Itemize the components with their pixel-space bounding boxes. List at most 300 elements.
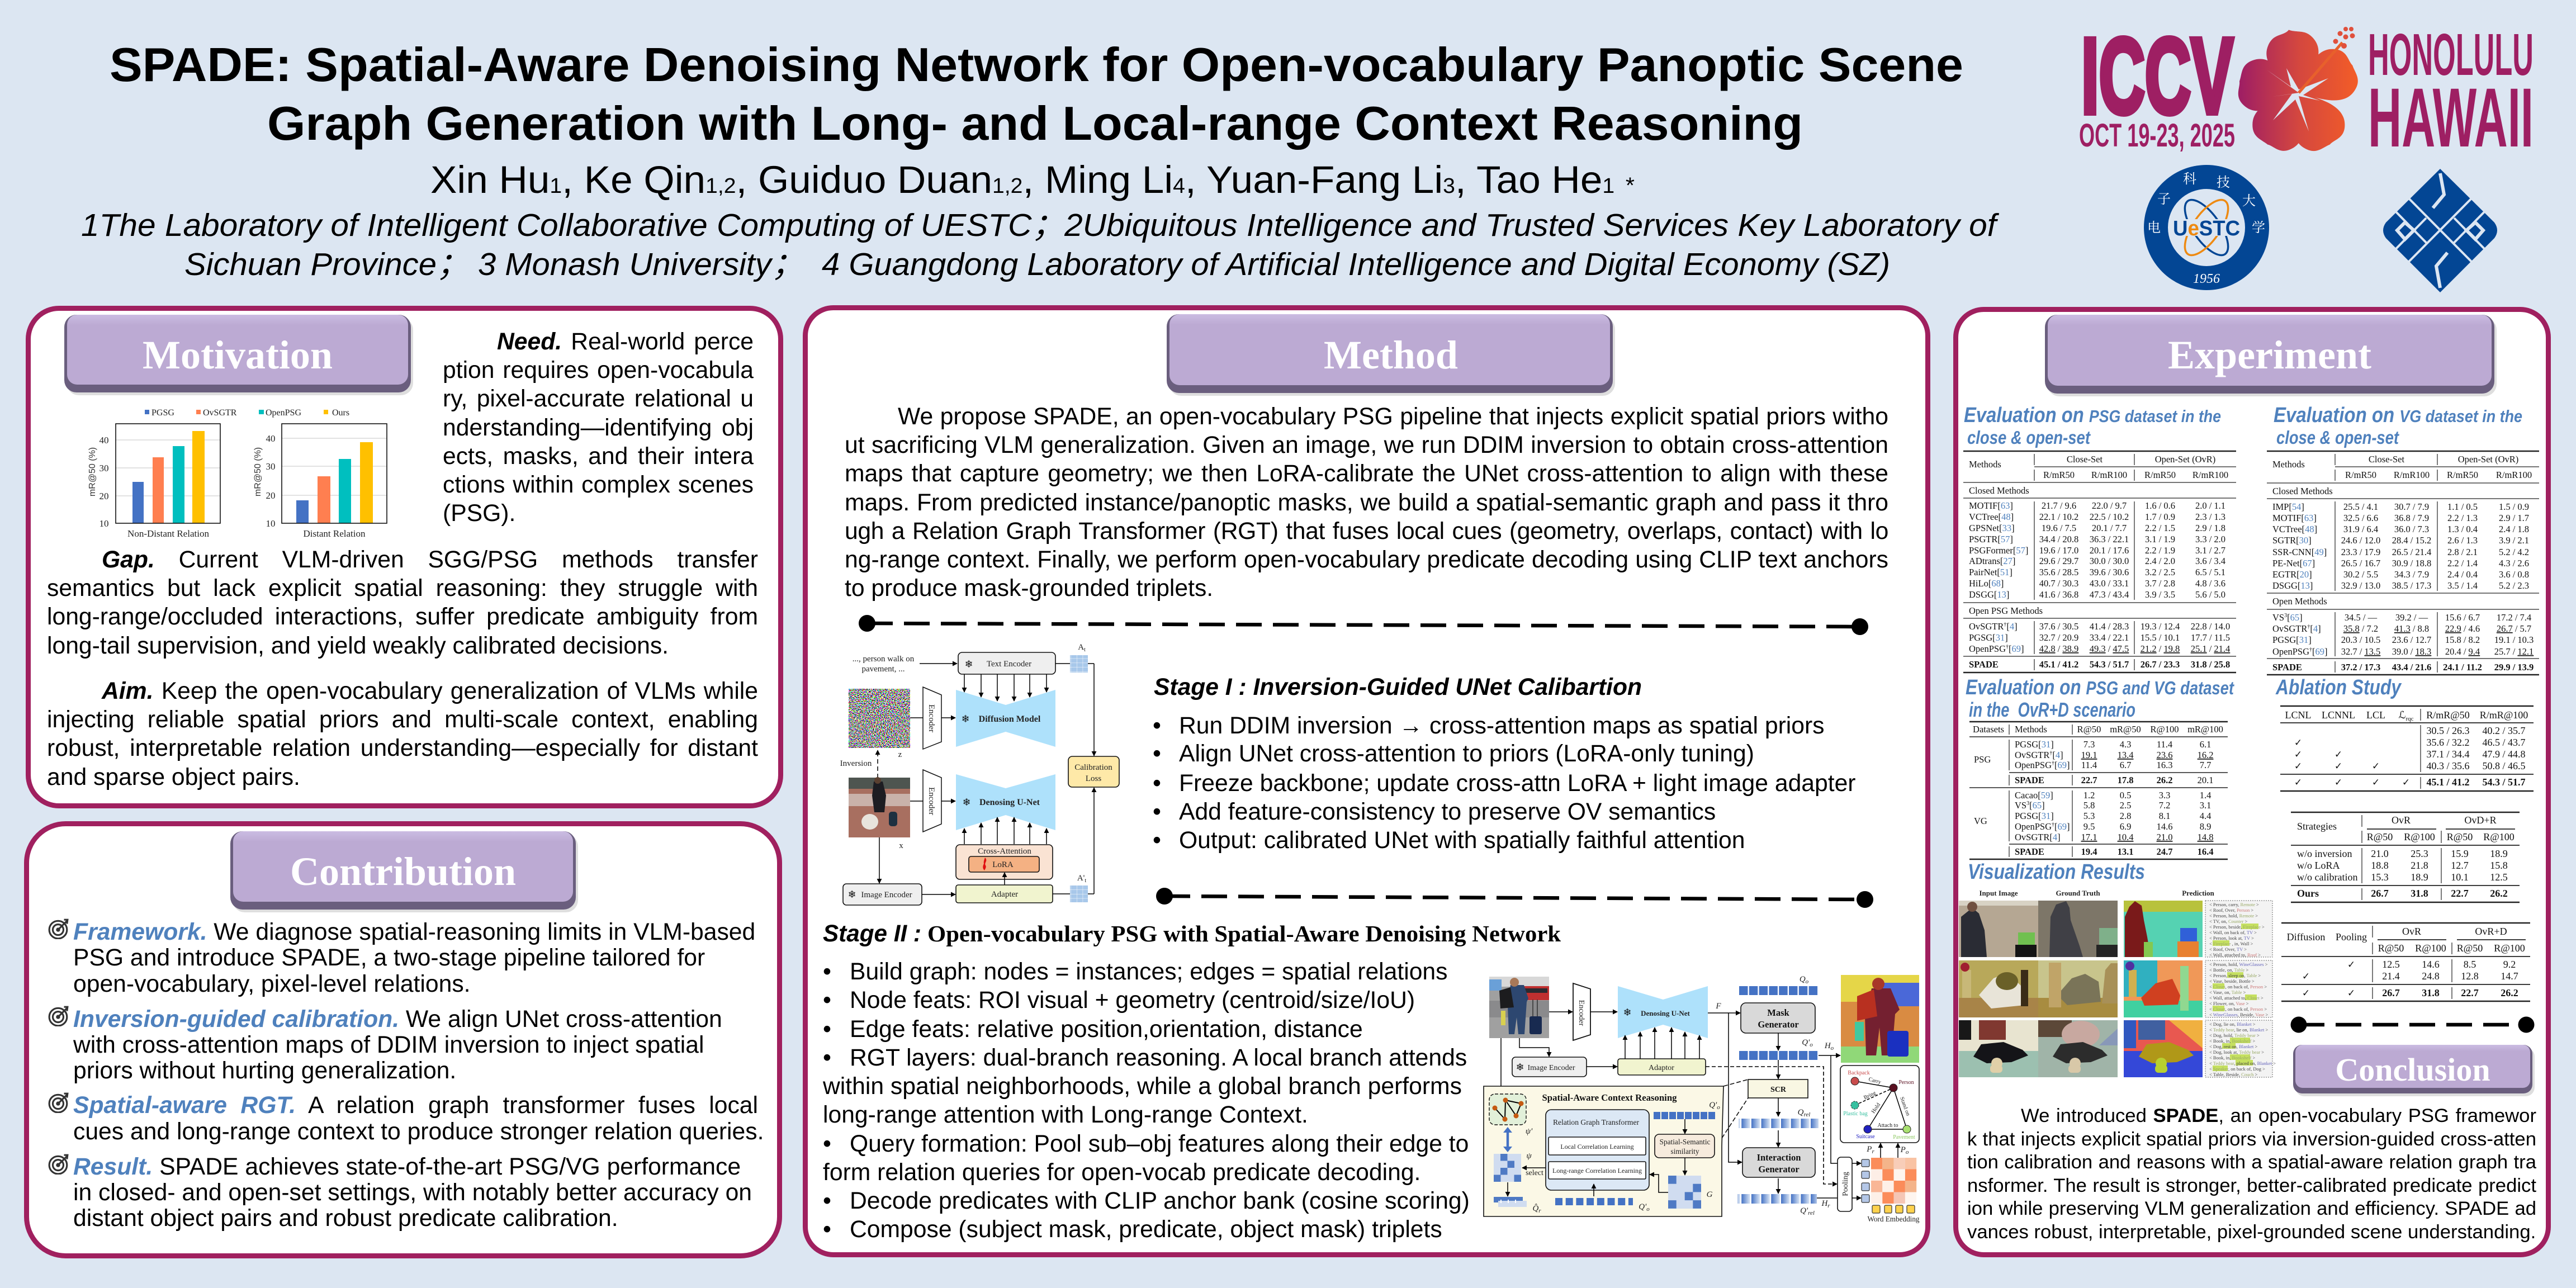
table: VG evaluation: 3.6 / 0.8 [2499, 569, 2529, 580]
adapter [956, 885, 1053, 903]
table: VG evaluation: R/mR100 [2394, 470, 2430, 480]
table: ablation strategies: Ours [2297, 888, 2319, 899]
stage I bullets: Run DDIM inversion → cross-attention maps as spatial priors [1179, 712, 1825, 739]
prediction text panel 2: < WineGlasses, Beside, Vase > [2209, 1012, 2268, 1017]
table: diffusion and pooling: 24.8 [2422, 970, 2440, 982]
heading: PSG evaluation [1964, 404, 2221, 448]
heading: motivation [64, 315, 413, 395]
table: ablation strategies: 31.8 [2411, 888, 2428, 899]
text: need: ects, masks, and their intera [443, 443, 754, 470]
stage II bullets: • [823, 987, 831, 1014]
text: gap [47, 546, 758, 663]
stage II bullets: • [823, 1130, 831, 1157]
table: PSG evaluation: Methods [1969, 459, 2001, 470]
affiliations: Sichuan Province； 3 Monash University； 4 Guangdong Laboratory of Artificial Intelligence and Digital Economy (SZ) [184, 247, 1890, 282]
table: ablation strategies: R@100 [2404, 831, 2435, 842]
table: PSG evaluation: 36.3 / 22.1 [2090, 534, 2129, 544]
text: need: ry, pixel-accurate relational u [443, 385, 754, 412]
prediction text panel 3: < Dog, look at, Teddy bear > [2209, 1049, 2264, 1055]
table: PSG evaluation: 49.3 / 47.5 [2090, 643, 2129, 654]
table: ablation components: ✓ [2402, 777, 2410, 788]
prediction text panel 3: < Teddy bear, placed on, Blanket > [2209, 1060, 2276, 1066]
bar chart: distant relation: 10 [266, 518, 275, 529]
heading: visualization results: Visualization Results [1968, 860, 2145, 884]
bar chart: distant relation [253, 424, 387, 539]
table: VG evaluation: 1.3 / 0.4 [2447, 524, 2478, 534]
text: method overview: maps. From predicted instance/panoptic masks, we build a spatial-semantic graph and pass it thro [845, 489, 1888, 516]
table: OvR+D evaluation: 16.4 [2198, 846, 2213, 857]
text: method overview: ng-range context. Finally, we perform open-vocabulary predicate decoding using CLIP text anchors [845, 546, 1888, 573]
table: VG evaluation: 32.7 / 13.5 [2341, 646, 2380, 657]
heading: VG evaluation: close & open-set [2276, 427, 2400, 448]
table: OvR+D evaluation: 20.1 [2198, 775, 2213, 785]
text: gap: Gap. Current VLM-driven SGG/PSG methods transfer [102, 546, 758, 573]
table: ablation strategies: 22.7 [2451, 888, 2469, 899]
heading: ablation study: Ablation Study [2275, 676, 2402, 699]
table: diffusion and pooling: ✓ [2302, 988, 2310, 999]
text: conclusion: vances robust, interpretable, pixel-grounded scene understanding. [1967, 1221, 2536, 1243]
table: VG evaluation: 30.2 / 5.5 [2343, 569, 2378, 580]
table: ablation strategies: 26.2 [2490, 888, 2508, 899]
table: PSG evaluation: PSGTR[57] [1969, 534, 2013, 544]
table: PSG evaluation: OvSGTR [1969, 621, 2004, 632]
heading: PSG evaluation: close & open-set [1967, 427, 2091, 448]
cross-attention [956, 845, 1053, 879]
table: OvR+D evaluation: 1.4 [2200, 790, 2211, 801]
refined object queries: o [1831, 1045, 1834, 1052]
table: VG evaluation: 2.4 / 1.8 [2499, 524, 2529, 534]
image encoder [1512, 1057, 1587, 1077]
table: ablation strategies: 12.7 [2451, 860, 2469, 871]
title: SPADE: Spatial-Aware Denoising Network for Open-vocabulary Panoptic Scene [110, 39, 1963, 92]
table: PSG evaluation: 29.6 / 29.7 [2039, 556, 2078, 566]
table: diffusion and pooling: Pooling [2336, 931, 2367, 943]
relation graph: Bring [1863, 1090, 1877, 1101]
mask generator [1741, 1003, 1815, 1033]
stage II title: Stage II : [823, 920, 921, 947]
table: OvR+D evaluation: mR@100 [2187, 724, 2223, 735]
dashed divider 2 [1156, 888, 1873, 908]
figure: stage I pipeline: ..., person walk on [853, 655, 915, 664]
table: VG evaluation [2267, 451, 2539, 675]
stage II bullets: Decode predicates with CLIP anchor bank (cosine scoring) [850, 1187, 1470, 1214]
table: PSG evaluation: 5.6 / 5.0 [2195, 589, 2225, 600]
table: VG evaluation: 5.2 / 2.3 [2499, 580, 2529, 591]
table: VG evaluation: 4] [2313, 623, 2321, 634]
table: OvR+D evaluation: 16.3 [2157, 760, 2172, 770]
bar chart: non-distant relation: mR@50 (%) [88, 447, 97, 496]
table: VG evaluation: Methods [2272, 459, 2305, 470]
table: PSG evaluation: PairNet[51] [1969, 567, 2012, 577]
heading: OvR+D evaluation: Evaluation on PSG and VG dataset [1966, 676, 2235, 699]
psi matrix [1494, 1152, 1532, 1182]
table: VG evaluation: 36.8 / 7.9 [2394, 513, 2429, 523]
text: gap: long-tail supervision, and yield weakly calibrated decisions. [47, 632, 669, 659]
table: ablation components: LCL [2366, 709, 2385, 721]
title [110, 39, 1963, 150]
relation graph: Suitcase [1856, 1134, 1875, 1140]
table: PSG evaluation: R/mR50 [2144, 470, 2176, 480]
table: OvR+D evaluation: 17.1 [2081, 832, 2097, 842]
stage II bullets: Compose (subject mask, predicate, object mask) triplets [850, 1216, 1442, 1243]
table: VG evaluation: 2.4 / 0.4 [2447, 569, 2478, 580]
input photo [849, 777, 910, 837]
prediction text panel 3: < Dog, lie on, Blanket > [2209, 1021, 2256, 1027]
stage II bullets: • [823, 1216, 831, 1243]
table: PSG evaluation: 22.0 / 9.7 [2092, 500, 2127, 511]
image encoder: Image Encoder [861, 891, 912, 899]
table: OvR+D evaluation: 11.4 [2081, 760, 2097, 770]
object queries inner [1654, 1101, 1720, 1116]
prediction text panel 2 [2205, 960, 2272, 1017]
prediction text panel 1: < Wall, on back of, TV > [2209, 930, 2257, 935]
table: VG evaluation: 28.4 / 15.2 [2392, 535, 2431, 546]
text: conclusion: k that injects explicit spatial priors via inversion-guided cross-atten [1967, 1129, 2536, 1150]
text: conclusion: We introduced SPADE, an open-vocabulary PSG framewor [2021, 1105, 2536, 1126]
table: PSG evaluation: GPSNet[33] [1969, 523, 2015, 533]
stage II title: Open-vocabulary PSG with Spatial-Aware Denoising Network [927, 921, 1561, 946]
table: VG evaluation: OvSGTR [2272, 623, 2307, 634]
table: ablation components: 40.2 / 35.7 [2482, 725, 2526, 736]
logo: ICCV Honolulu Hawaii: OCT 19-23, 2025 [2079, 117, 2235, 154]
refined object queries: H [1825, 1041, 1831, 1050]
table: VG evaluation: [ [2310, 623, 2313, 634]
table: diffusion and pooling: R@50 [2378, 943, 2404, 954]
table: VG evaluation: 3 [2284, 613, 2287, 619]
encoder: Encoder [927, 704, 936, 732]
bar chart: distant relation: mR@50 (%) [253, 447, 263, 496]
table: PSG evaluation: 42.8 / 38.9 [2039, 643, 2078, 654]
text: need: Need. Real-world perce [497, 328, 754, 355]
relation graph: Carry [1868, 1076, 1882, 1086]
prediction text panel 2: < Closet, on back of, Person > [2209, 984, 2267, 989]
table: diffusion and pooling: 14.6 [2422, 959, 2440, 970]
item: framework [73, 918, 755, 997]
text: gap: long-range/occluded interactions, suffer predicate ambiguity from [47, 603, 758, 630]
prediction text panel 3: < Book, in, Bookshelf > [2209, 1038, 2256, 1044]
table: OvR+D evaluation: VG [1974, 816, 1987, 826]
table: OvR+D evaluation: 4.3 [2120, 739, 2131, 750]
table: OvR+D evaluation: 8.1 [2159, 811, 2170, 821]
table: ablation strategies: 15.3 [2371, 872, 2389, 883]
object queries [1739, 975, 1819, 991]
table: OvR+D evaluation: 6.9 [2120, 821, 2131, 832]
table: PSG evaluation: 1.7 / 0.9 [2145, 512, 2175, 522]
table: PSG evaluation: 22.5 / 10.2 [2090, 512, 2129, 522]
attention map [1070, 643, 1088, 673]
stage I bullets: Add feature-consistency to preserve OV semantics [1179, 798, 1716, 825]
table: diffusion and pooling: 14.7 [2501, 970, 2518, 982]
bar chart: distant relation: Distant Relation [304, 528, 366, 539]
relation graph: Person [1898, 1079, 1914, 1086]
table: ablation strategies: 26.7 [2371, 888, 2389, 899]
table: PSG evaluation: 41.6 / 36.8 [2039, 589, 2078, 600]
mask generator: Generator [1758, 1019, 1799, 1030]
item: result: in closed- and open-set settings, with notably better accuracy on [73, 1179, 752, 1206]
encoder: Encoder [1577, 1000, 1585, 1026]
pooling [1838, 1157, 1852, 1211]
figure: stage II pipeline: P [1901, 1145, 1906, 1154]
table: diffusion and pooling: R@100 [2415, 943, 2446, 954]
heading: method [1167, 314, 1615, 396]
table: OvR+D evaluation: 69] [2058, 821, 2070, 832]
relation graph: Plastic bag [1843, 1111, 1868, 1117]
logo: UESTC: 子 [2157, 188, 2171, 207]
relation graph: Pavement [1893, 1134, 1915, 1140]
table: OvR+D evaluation: 65] [2033, 800, 2045, 811]
stage II bullets: Build graph: nodes = instances; edges = spatial relations [850, 958, 1447, 985]
table: ablation components: ✓ [2334, 777, 2342, 788]
mask generator: Mask [1767, 1007, 1790, 1018]
table: OvR+D evaluation: [ [2029, 800, 2033, 811]
item: inversion-guided calibration: with cross-attention maps of DDIM inversion to inject spatial [73, 1031, 704, 1058]
selected queries: r [1538, 1208, 1541, 1214]
relation queries: Q [1798, 1108, 1804, 1117]
cross-attention: Cross-Attention [978, 847, 1031, 856]
table: VG evaluation: PGSG[31] [2272, 634, 2312, 645]
affiliations [81, 207, 1999, 282]
table: ablation strategies: OvD+R [2464, 815, 2497, 826]
prediction text panel 3: < Table, Beside, Couch > [2209, 1072, 2257, 1077]
table: PSG evaluation: ADtrans[27] [1969, 556, 2015, 566]
denoising u-net: Denosing U-Net [979, 798, 1040, 807]
prediction text panel 3: < Book, in, Bookshelf > [2209, 1055, 2256, 1060]
table: diffusion and pooling: OvR+D [2475, 926, 2507, 937]
table: VG evaluation: 29.9 / 13.9 [2494, 662, 2534, 673]
table: ablation components: ✓ [2294, 761, 2302, 772]
relation graph: Hold [1871, 1102, 1882, 1115]
calibrated attention map [1070, 874, 1088, 902]
prediction text panel 3: < Dog, rest on, Blanket > [2209, 1044, 2258, 1049]
table: PSG evaluation: 4.8 / 3.6 [2195, 578, 2225, 589]
chart legend: OvSGTR [203, 408, 237, 418]
table: VG evaluation: 2.8 / 2.1 [2447, 547, 2478, 557]
authors: Xin Hu1, Ke Qin1,2, Guiduo Duan 1,2, Ming Li4, Yuan-Fang Li 3, Tao He1 * [430, 158, 1635, 201]
table: PSG evaluation: OpenPSG [1969, 643, 2006, 654]
attention map: A [1078, 643, 1084, 652]
figure: stage I pipeline: pavement, ... [861, 665, 905, 674]
prediction text panel 2: < Flower, on, Vase > [2209, 1001, 2249, 1006]
prediction text panel 1: < Person, beside, Fireplace > [2209, 924, 2265, 930]
stage II bullets: within spatial neighborhoods, while a global branch performs [822, 1073, 1462, 1100]
table: diffusion and pooling: ✓ [2347, 988, 2355, 999]
table: PSG evaluation: R/mR100 [2193, 470, 2228, 480]
table: ablation strategies: 12.5 [2490, 872, 2508, 883]
icon: target [49, 1093, 68, 1112]
table: ablation strategies: w/o LoRA [2297, 860, 2340, 871]
text: conclusion [1967, 1105, 2549, 1247]
heading: experiment [2045, 315, 2497, 396]
table: VG evaluation: 24.6 / 12.0 [2341, 535, 2380, 546]
table: OvR+D evaluation: VS [2015, 800, 2026, 811]
text encoder box [958, 652, 1055, 674]
psi matrix: ψ [1526, 1152, 1532, 1161]
denoising u-net: Denosing U-Net [1641, 1009, 1690, 1017]
relation graph transformer: Long-range Correlation Learning [1552, 1167, 1642, 1175]
heat map [1871, 1158, 1916, 1204]
table: OvR+D evaluation: 5.3 [2083, 811, 2095, 821]
row 1 scene [1959, 901, 2203, 957]
table: PSG evaluation: Close-Set [2067, 454, 2103, 465]
table: PSG evaluation: 2.3 / 1.3 [2195, 512, 2225, 522]
prediction text panel 3: < Teddy bear, lie on, Blanket > [2209, 1027, 2269, 1033]
table: ablation strategies: 21.8 [2411, 860, 2428, 871]
table: OvR+D evaluation: 13.4 [2118, 750, 2133, 760]
table: PSG evaluation: 32.7 / 20.9 [2039, 632, 2078, 643]
spatial-aware context reasoning panel: ψ' [1526, 1127, 1533, 1136]
table: PSG evaluation: SPADE [1969, 659, 1999, 670]
bar chart: non-distant relation: Non-Distant Relation [127, 528, 209, 539]
visualization grid: Prediction [2182, 889, 2215, 897]
logo: UESTC: 电 [2147, 216, 2161, 236]
table: OvR+D evaluation: SPADE [2015, 846, 2044, 857]
row 3 scene [1959, 1020, 2203, 1077]
relation graph: Stand on [1898, 1096, 1911, 1117]
table: VG evaluation: Closed Methods [2272, 486, 2333, 496]
table: diffusion and pooling: 12.5 [2382, 959, 2400, 970]
prediction text panel 3: < Speaker, on back of, Dog > [2209, 1066, 2265, 1072]
stage II bullets: • [823, 1187, 831, 1214]
visualization grid [1959, 889, 2276, 1077]
table: OvR+D evaluation: 1.2 [2083, 790, 2095, 801]
table: PSG evaluation: 3.3 / 2.0 [2195, 534, 2225, 544]
table: VG evaluation: 32.9 / 13.0 [2341, 580, 2380, 591]
table: ablation strategies: 18.9 [2490, 848, 2508, 859]
table: OvR+D evaluation: 3.3 [2159, 790, 2170, 801]
table: diffusion and pooling: 31.8 [2422, 987, 2440, 998]
table: VG evaluation: IMP[54] [2272, 501, 2304, 512]
object queries: Q [1800, 975, 1806, 984]
visualization grid: Input Image [1979, 889, 2018, 897]
prediction text panel 3: < Dog, hold, Teddy bear > [2209, 1033, 2260, 1038]
visualization grid: Ground Truth [2056, 889, 2100, 897]
table: diffusion and pooling: ✓ [2347, 959, 2355, 970]
table: PSG evaluation: 22.1 / 10.2 [2039, 512, 2078, 522]
stage I title: Stage I : Inversion-Guided UNet Calibartion [1154, 674, 1642, 700]
table: OvR+D evaluation: 21.0 [2157, 832, 2172, 842]
logo: UESTC [2144, 165, 2269, 290]
table: ablation components: 37.1 / 34.4 [2426, 749, 2470, 760]
bar chart: non-distant relation: 40 [100, 435, 108, 446]
text: method overview [845, 402, 1888, 607]
table: PSG evaluation: VCTree[48] [1969, 512, 2014, 522]
spatial-semantic similarity: similarity [1671, 1147, 1699, 1156]
logo: UESTC: 学 [2252, 216, 2265, 236]
calibration loss: Loss [1086, 774, 1101, 783]
text encoder box: ❄ [964, 659, 973, 670]
table: OvR+D evaluation: 16.2 [2198, 750, 2213, 760]
table: OvR+D evaluation: [ [2052, 750, 2056, 760]
bar chart: non-distant relation: 20 [100, 491, 108, 501]
table: diffusion and pooling: R@100 [2494, 943, 2525, 954]
table: VG evaluation: 69] [2315, 646, 2328, 657]
table: VG evaluation: 26.7 / 5.7 [2497, 623, 2531, 634]
item: spatial-aware RGT: cues and long-range context to produce stronger relation queries. [73, 1118, 764, 1145]
prediction text panel 1: < Person, look at, TV > [2209, 935, 2254, 941]
table: PSG evaluation: 17.7 / 11.5 [2191, 632, 2230, 643]
table: VG evaluation: VCTree[48] [2272, 524, 2317, 534]
attention map: t [1084, 647, 1086, 653]
table: ablation components: R/mR@100 [2480, 709, 2528, 721]
table: diffusion and pooling: R@50 [2457, 943, 2483, 954]
table: VG evaluation: 38.5 / 17.3 [2392, 580, 2431, 591]
table: OvR+D evaluation: 14.8 [2198, 832, 2213, 842]
input photo [1489, 977, 1549, 1038]
table: VG evaluation: 36.0 / 7.3 [2394, 524, 2429, 534]
diffusion model: ❄ [961, 713, 970, 725]
table: OvR+D evaluation: 69] [2058, 760, 2070, 770]
table: ablation components: 50.8 / 46.5 [2482, 760, 2526, 771]
table: OvR+D evaluation: 4.4 [2200, 811, 2211, 821]
table: OvR+D evaluation: † [2049, 750, 2052, 756]
table: VG evaluation: OpenPSG [2272, 646, 2309, 657]
item: result: distant object pairs and robust predicate calibration. [73, 1205, 618, 1232]
noise image [849, 689, 910, 748]
table: VG evaluation: 3.5 / 1.4 [2447, 580, 2478, 591]
table: ablation components: 54.3 / 51.7 [2482, 776, 2526, 788]
table: ablation components: 45.1 / 41.2 [2426, 776, 2470, 788]
table: OvR+D evaluation: 24.7 [2157, 846, 2172, 857]
table: PSG evaluation: 43.0 / 33.1 [2090, 578, 2129, 589]
table: VG evaluation: [ [2312, 646, 2315, 657]
table: VG evaluation: 2.2 / 1.4 [2447, 558, 2478, 569]
table: VG evaluation: 5.2 / 4.2 [2499, 547, 2529, 557]
table: ablation components: R/mR@50 [2426, 709, 2470, 721]
table: ablation strategies: 15.8 [2490, 860, 2508, 871]
table: VG evaluation: SPADE [2272, 662, 2302, 673]
table: VG evaluation: 15.6 / 6.7 [2445, 612, 2480, 623]
object queries inner: Q' [1709, 1101, 1717, 1110]
G matrix: G [1707, 1190, 1713, 1199]
logo: UESTC: 大 [2242, 190, 2256, 209]
text: gap: semantics but lack explicit spatial reasoning: they struggle with [47, 575, 758, 602]
table: OvR+D evaluation: 7.2 [2159, 800, 2170, 811]
text: need: ctions within complex scenes [443, 471, 754, 498]
interaction generator: Interaction [1757, 1152, 1801, 1163]
table: OvR+D evaluation: 7.7 [2200, 760, 2211, 770]
table: PSG evaluation: 3.2 / 2.5 [2145, 567, 2175, 577]
table: PSG evaluation: Open-Set (OvR) [2155, 454, 2215, 465]
stage II bullets: RGT layers: dual-branch reasoning. A local branch attends [850, 1044, 1467, 1071]
panel: motivation [28, 309, 780, 806]
table: PSG evaluation: 69] [2012, 643, 2024, 654]
table: PSG evaluation: 3.1 / 2.7 [2195, 545, 2225, 556]
table: VG evaluation: 25.7 / 12.1 [2494, 646, 2534, 657]
table: OvR+D evaluation: [ [2054, 821, 2058, 832]
table: OvR+D evaluation: OpenPSG [2015, 821, 2052, 832]
adaptor [1618, 1059, 1706, 1075]
table: VG evaluation: Close-Set [2369, 454, 2404, 465]
table: ablation components: ✓ [2372, 761, 2380, 772]
relation graph transformer: Relation Graph Transformer [1553, 1118, 1639, 1126]
figure: stage II pipeline: P [1867, 1145, 1872, 1154]
stage II bullets: long-range attention with Long-range Context. [823, 1101, 1308, 1128]
table: OvR+D evaluation: Methods [2015, 724, 2047, 735]
calibrated attention map: A' [1077, 874, 1085, 883]
table: OvR+D evaluation: 22.7 [2081, 775, 2097, 785]
table: VG evaluation: 2.2 / 1.3 [2447, 513, 2478, 523]
query tokens [1862, 1159, 1869, 1202]
heading: experiment: Experiment [2168, 333, 2371, 377]
table: VG evaluation: 30.7 / 7.9 [2394, 501, 2429, 512]
table: PSG evaluation: 35.6 / 28.5 [2039, 567, 2078, 577]
text: aim: robust, interpretable relation understanding—especially for distant [47, 735, 758, 761]
image encoder: ❄ [1516, 1062, 1524, 1073]
table: PSG evaluation: 2.2 / 1.9 [2145, 545, 2175, 556]
table: ablation components: 46.5 / 43.7 [2482, 737, 2526, 748]
table: diffusion and pooling: 9.2 [2503, 959, 2516, 970]
table: VG evaluation: R/mR50 [2447, 470, 2478, 480]
